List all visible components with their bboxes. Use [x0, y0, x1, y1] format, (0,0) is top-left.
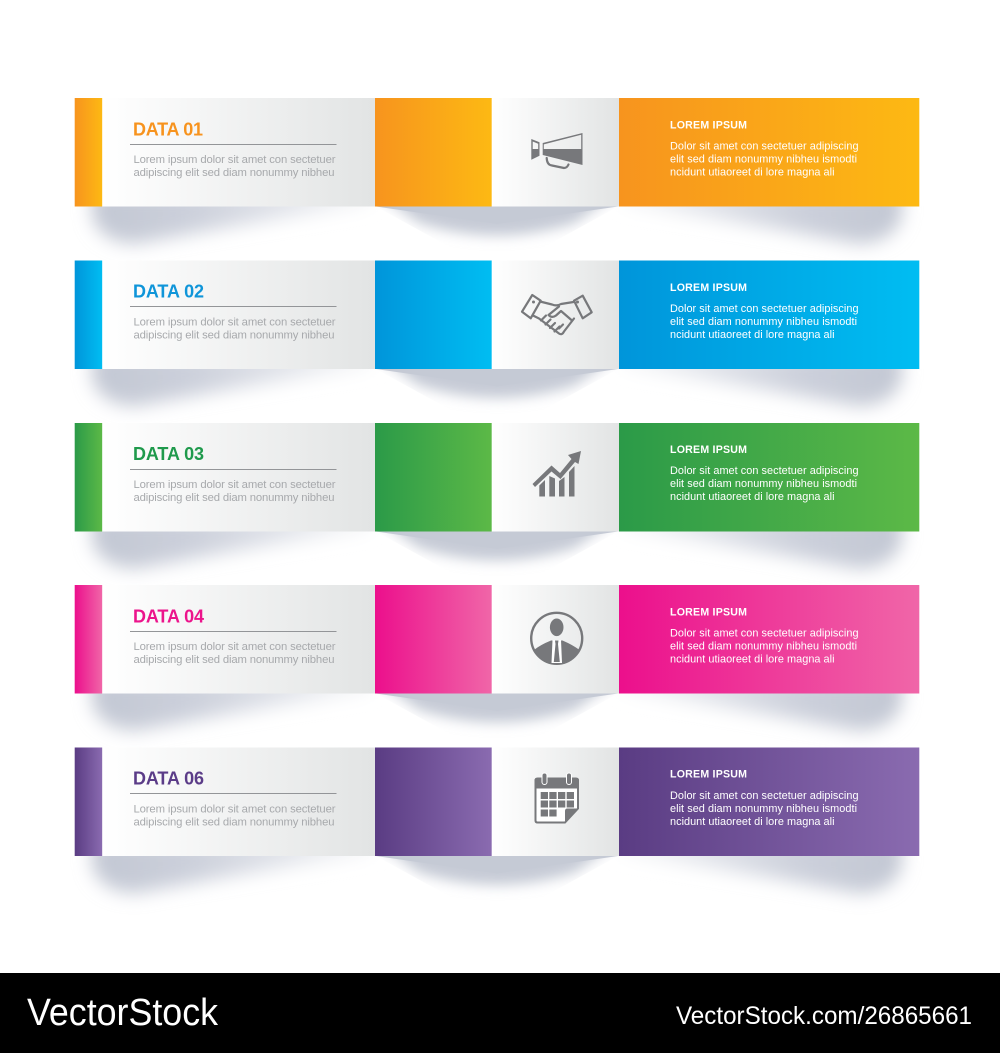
- right colour panel: [619, 98, 919, 206]
- left grey panel: [102, 423, 375, 532]
- description: adipiscing elit sed diam nonummy nibheu: [134, 492, 334, 504]
- right text: Dolor sit amet con sectetuer adipiscing: [670, 140, 858, 152]
- left shadow: [82, 369, 346, 414]
- left colour tab: [75, 748, 102, 856]
- description: Lorem ipsum dolor sit amet con sectetuer: [134, 641, 336, 653]
- left shadow: [82, 856, 346, 902]
- right text: ncidunt utiaoreet di lore magna ali: [670, 329, 834, 341]
- right text: Dolor sit amet con sectetuer adipiscing: [670, 465, 858, 477]
- centre colour band: [375, 748, 492, 856]
- centre colour band: [375, 260, 492, 369]
- left shadow: [82, 694, 346, 739]
- right shadow: [649, 206, 912, 252]
- right text: elit sed diam nonummy nibheu ismodti: [670, 154, 857, 166]
- right text: Dolor sit amet con sectetuer adipiscing: [670, 628, 858, 640]
- right title: LOREM IPSUM: [670, 606, 747, 618]
- right text: ncidunt utiaoreet di lore magna ali: [670, 491, 834, 503]
- icon grey panel: [492, 423, 619, 532]
- description: Lorem ipsum dolor sit amet con sectetuer: [134, 154, 336, 166]
- left colour tab: [75, 585, 102, 694]
- left grey panel: [102, 260, 375, 369]
- right shadow: [649, 856, 912, 902]
- description: Lorem ipsum dolor sit amet con sectetuer: [134, 479, 336, 491]
- right text: ncidunt utiaoreet di lore magna ali: [670, 166, 834, 178]
- centre colour band: [375, 423, 492, 532]
- right text: ncidunt utiaoreet di lore magna ali: [670, 654, 834, 666]
- right text: Dolor sit amet con sectetuer adipiscing: [670, 303, 858, 315]
- brand name: VectorStock: [27, 992, 219, 1034]
- center shadow: [376, 532, 618, 567]
- description: adipiscing elit sed diam nonummy nibheu: [134, 167, 334, 179]
- image URL: VectorStock.com/26865661: [676, 1002, 972, 1030]
- right text: elit sed diam nonummy nibheu ismodti: [670, 478, 857, 490]
- left colour tab: [75, 98, 102, 206]
- right colour panel: [619, 423, 919, 532]
- heading: DATA 01: [133, 120, 203, 140]
- left grey panel: [102, 98, 375, 206]
- right colour panel: [619, 585, 919, 694]
- panel: row 2: [75, 260, 919, 406]
- left colour tab: [75, 423, 102, 532]
- center shadow: [376, 206, 618, 242]
- icon: calendar: [534, 773, 579, 822]
- left shadow: [82, 206, 346, 252]
- right text: elit sed diam nonummy nibheu ismodti: [670, 640, 857, 652]
- icon grey panel: [492, 260, 619, 369]
- right text: elit sed diam nonummy nibheu ismodti: [670, 316, 857, 328]
- right title: LOREM IPSUM: [670, 282, 747, 294]
- icon: handshake: [522, 295, 592, 334]
- centre colour band: [375, 98, 492, 206]
- right title: LOREM IPSUM: [670, 444, 747, 456]
- left colour tab: [75, 260, 102, 369]
- right colour panel: [619, 748, 919, 856]
- heading: DATA 04: [133, 606, 204, 626]
- right title: LOREM IPSUM: [670, 120, 747, 132]
- left grey panel: [102, 585, 375, 694]
- watermark footer bar: [0, 973, 1000, 1053]
- left grey panel: [102, 748, 375, 856]
- description: adipiscing elit sed diam nonummy nibheu: [134, 330, 334, 342]
- icon: megaphone: [531, 133, 582, 168]
- icon: businessman: [531, 613, 582, 664]
- right shadow: [649, 532, 912, 578]
- centre colour band: [375, 585, 492, 694]
- description: Lorem ipsum dolor sit amet con sectetuer: [134, 316, 336, 328]
- panel: row 4: [75, 585, 919, 731]
- heading: DATA 02: [133, 282, 204, 302]
- center shadow: [376, 856, 618, 892]
- right text: ncidunt utiaoreet di lore magna ali: [670, 816, 834, 828]
- heading: DATA 03: [133, 444, 204, 464]
- panel: row 5: [75, 748, 919, 894]
- right shadow: [649, 694, 912, 740]
- description: adipiscing elit sed diam nonummy nibheu: [134, 816, 334, 828]
- panel: row 1: [75, 98, 919, 244]
- icon grey panel: [492, 748, 619, 856]
- icon grey panel: [492, 585, 619, 694]
- heading: DATA 06: [133, 768, 204, 788]
- right shadow: [649, 369, 912, 415]
- icon: growth chart: [532, 451, 581, 496]
- right title: LOREM IPSUM: [670, 768, 747, 780]
- description: adipiscing elit sed diam nonummy nibheu: [134, 654, 334, 666]
- right text: elit sed diam nonummy nibheu ismodti: [670, 803, 857, 815]
- center shadow: [376, 369, 618, 404]
- icon grey panel: [492, 98, 619, 206]
- description: Lorem ipsum dolor sit amet con sectetuer: [134, 804, 336, 816]
- panel: row 3: [75, 423, 919, 569]
- right colour panel: [619, 260, 919, 369]
- left shadow: [82, 532, 346, 577]
- right text: Dolor sit amet con sectetuer adipiscing: [670, 790, 858, 802]
- center shadow: [376, 694, 618, 729]
